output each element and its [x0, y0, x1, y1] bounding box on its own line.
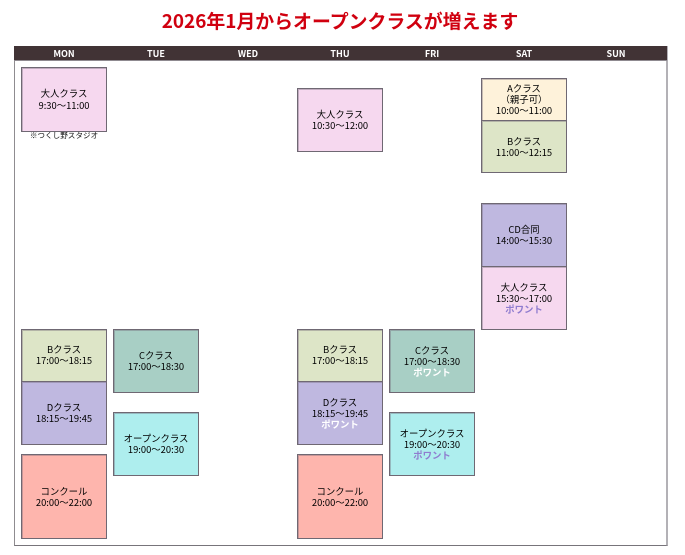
class: Tuesday C — [113, 329, 199, 393]
class: Thursday concours: コンクール — [317, 484, 363, 498]
class: Saturday CD combined: CD合同 — [508, 222, 540, 236]
day: Wednesday: WED — [238, 47, 258, 60]
title: 2026年1月からオープンクラスが増えます — [162, 6, 518, 34]
class: Thursday concours — [297, 454, 383, 539]
day: Friday: FRI — [425, 47, 439, 60]
class: Saturday A — [481, 78, 567, 121]
class: Thursday D: 18:15〜19:45 — [312, 406, 368, 420]
class: Thursday B: 17:00〜18:15 — [312, 353, 368, 367]
class: Saturday A: （親子可） — [501, 92, 547, 106]
class: Monday B: Bクラス — [47, 342, 81, 356]
class: Tuesday open — [113, 412, 199, 476]
class: Friday open: オープンクラス — [400, 426, 464, 440]
class: Friday C: Cクラス — [415, 342, 449, 356]
class: Thursday B: Bクラス — [323, 342, 357, 356]
day: Thursday: THU — [330, 47, 350, 60]
class: Saturday adult: 大人クラス — [501, 280, 547, 294]
class: Thursday adult — [297, 88, 383, 152]
day: Monday: MON — [53, 47, 75, 60]
class: Thursday adult: 10:30〜12:00 — [312, 118, 368, 132]
class: Saturday adult: 15:30〜17:00 — [496, 290, 552, 304]
class: Thursday B — [297, 329, 383, 382]
class: Saturday A: 10:00〜11:00 — [496, 103, 552, 117]
class: Monday D: 18:15〜19:45 — [36, 411, 92, 425]
class: Monday adult — [21, 67, 107, 132]
class: Friday C — [389, 329, 475, 393]
class: Friday open: ポワント — [413, 448, 451, 462]
class: Monday B — [21, 329, 107, 382]
weekday header bar — [14, 46, 667, 61]
class: Monday concours — [21, 454, 107, 539]
class: Monday concours: コンクール — [41, 484, 87, 498]
day: Tuesday: TUE — [147, 47, 165, 60]
class: Saturday B: Bクラス — [507, 134, 541, 148]
class: Monday D: Dクラス — [47, 400, 81, 414]
day: Saturday: SAT — [516, 47, 532, 60]
class: Monday B: 17:00〜18:15 — [36, 353, 92, 367]
class: Saturday CD combined — [481, 203, 567, 267]
class: Saturday adult: ポワント — [505, 302, 543, 316]
class: Friday C: ポワント — [413, 364, 451, 378]
class: Tuesday open: 19:00〜20:30 — [128, 442, 184, 456]
class: Friday open: 19:00〜20:30 — [404, 436, 460, 450]
class: Monday concours: 20:00〜22:00 — [36, 494, 92, 508]
class: Tuesday C: 17:00〜18:30 — [128, 359, 184, 373]
class: Thursday D — [297, 381, 383, 445]
class: Thursday D: Dクラス — [323, 394, 357, 408]
class: Thursday adult: 大人クラス — [317, 107, 363, 121]
class: Saturday adult — [481, 266, 567, 330]
class: Monday adult: 大人クラス — [41, 86, 87, 100]
class: Saturday B — [481, 120, 567, 173]
class: Thursday concours: 20:00〜22:00 — [312, 494, 368, 508]
class: Monday adult: 9:30〜11:00 — [38, 98, 90, 112]
class: Friday open — [389, 412, 475, 476]
class: Friday C: 17:00〜18:30 — [404, 354, 460, 368]
note: Tsukushino studio: ※つくし野スタジオ — [30, 130, 98, 141]
class: Tuesday C: Cクラス — [139, 348, 173, 362]
day: Sunday: SUN — [606, 47, 626, 60]
class: Saturday B: 11:00〜12:15 — [496, 144, 552, 158]
class: Thursday D: ポワント — [321, 416, 359, 430]
class: Tuesday open: オープンクラス — [124, 431, 188, 445]
class: Saturday CD combined: 14:00〜15:30 — [496, 233, 552, 247]
class: Monday D — [21, 381, 107, 445]
class: Saturday A: Aクラス — [507, 81, 541, 95]
